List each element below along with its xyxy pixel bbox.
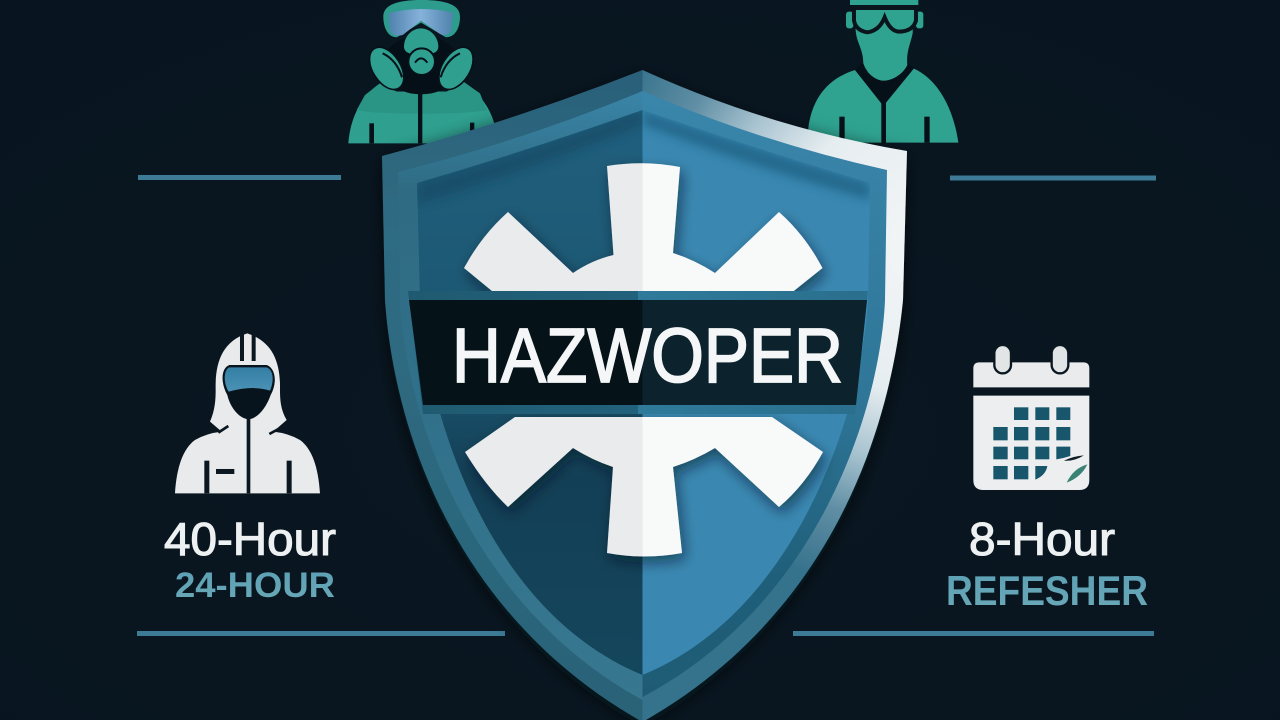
shield left inner band: [398, 91, 642, 700]
title: HAZWOPER: [452, 313, 843, 399]
asterisk emblem: upper half: [464, 163, 822, 298]
divider line: bottom right: [793, 631, 1154, 636]
divider line: top left: [138, 175, 341, 180]
shield right inner band: [642, 91, 887, 697]
banner right half: [642, 300, 867, 405]
panel inner shadow: left: [417, 110, 642, 205]
icon: calendar: [973, 345, 1089, 490]
infographic canvas: [137, 0, 1156, 720]
icon: worker in goggles and hard hat: [808, 0, 958, 143]
shield outer rim: [382, 70, 907, 720]
label: 40-Hour: 40-Hour: [164, 513, 336, 565]
shield emblem: [382, 70, 907, 720]
calendar day grid: [993, 407, 1087, 483]
label: 24-HOUR: 24-HOUR: [175, 566, 335, 605]
icon: worker in respirator mask: [348, 0, 495, 143]
label: 8-Hour: 8-Hour: [969, 513, 1115, 565]
shield left panel: [417, 110, 642, 675]
panel inner shadow: right: [642, 110, 870, 200]
label: REFESHER: REFESHER: [946, 567, 1148, 614]
icon: hazmat suit with hood: [175, 333, 320, 493]
shield right panel: [642, 110, 870, 675]
divider line: bottom left: [137, 631, 505, 636]
asterisk emblem: lower half: [465, 417, 823, 556]
banner frame: [408, 291, 868, 414]
banner left half: [409, 300, 642, 405]
divider line: top right: [950, 176, 1156, 180]
